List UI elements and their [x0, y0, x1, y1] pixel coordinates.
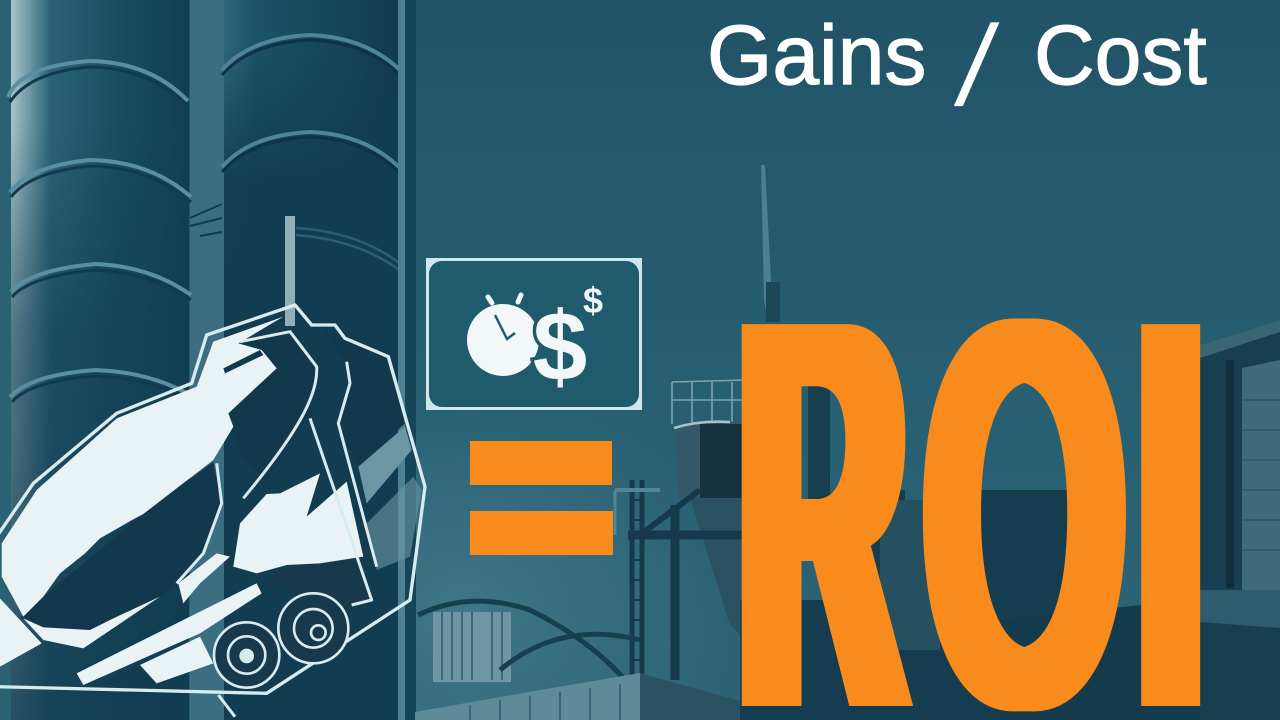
- lower left tanks and curved pipes: [418, 601, 640, 682]
- outer outline: [0, 305, 425, 693]
- denominator: Cost: [1034, 8, 1207, 102]
- wheel: right: [278, 593, 348, 663]
- mixer dark interior and stripes: [20, 327, 422, 687]
- silo: left: [8, 0, 191, 720]
- hopper tank with railing: [672, 380, 745, 640]
- central dark buildings: [740, 385, 1280, 720]
- inner outlines: [177, 332, 377, 717]
- slit in drum: [223, 350, 263, 373]
- numerator: Gains: [707, 8, 926, 102]
- icon panel: time and money: [426, 258, 642, 410]
- division slash: /: [950, 3, 1003, 130]
- icon: small dollar sign: $: [583, 280, 603, 321]
- right warehouse: [1200, 320, 1280, 720]
- foreground roof: [415, 673, 745, 720]
- connecting brackets between silos: [190, 204, 222, 236]
- drum white body: [0, 317, 363, 685]
- equals sign: [470, 441, 613, 555]
- vertical pipes: [285, 0, 405, 720]
- title formula: Gains / Cost: [707, 3, 1207, 130]
- concrete mixer truck line illustration: [0, 305, 425, 717]
- antenna mast: [761, 165, 780, 322]
- steel frame with ladder: [615, 480, 745, 700]
- industrial plant silhouette: [415, 165, 1280, 720]
- wheel: left: [214, 622, 279, 688]
- icon: stopwatch: [467, 295, 539, 376]
- silo: right: [222, 0, 402, 720]
- icon: large dollar sign: $: [533, 291, 587, 401]
